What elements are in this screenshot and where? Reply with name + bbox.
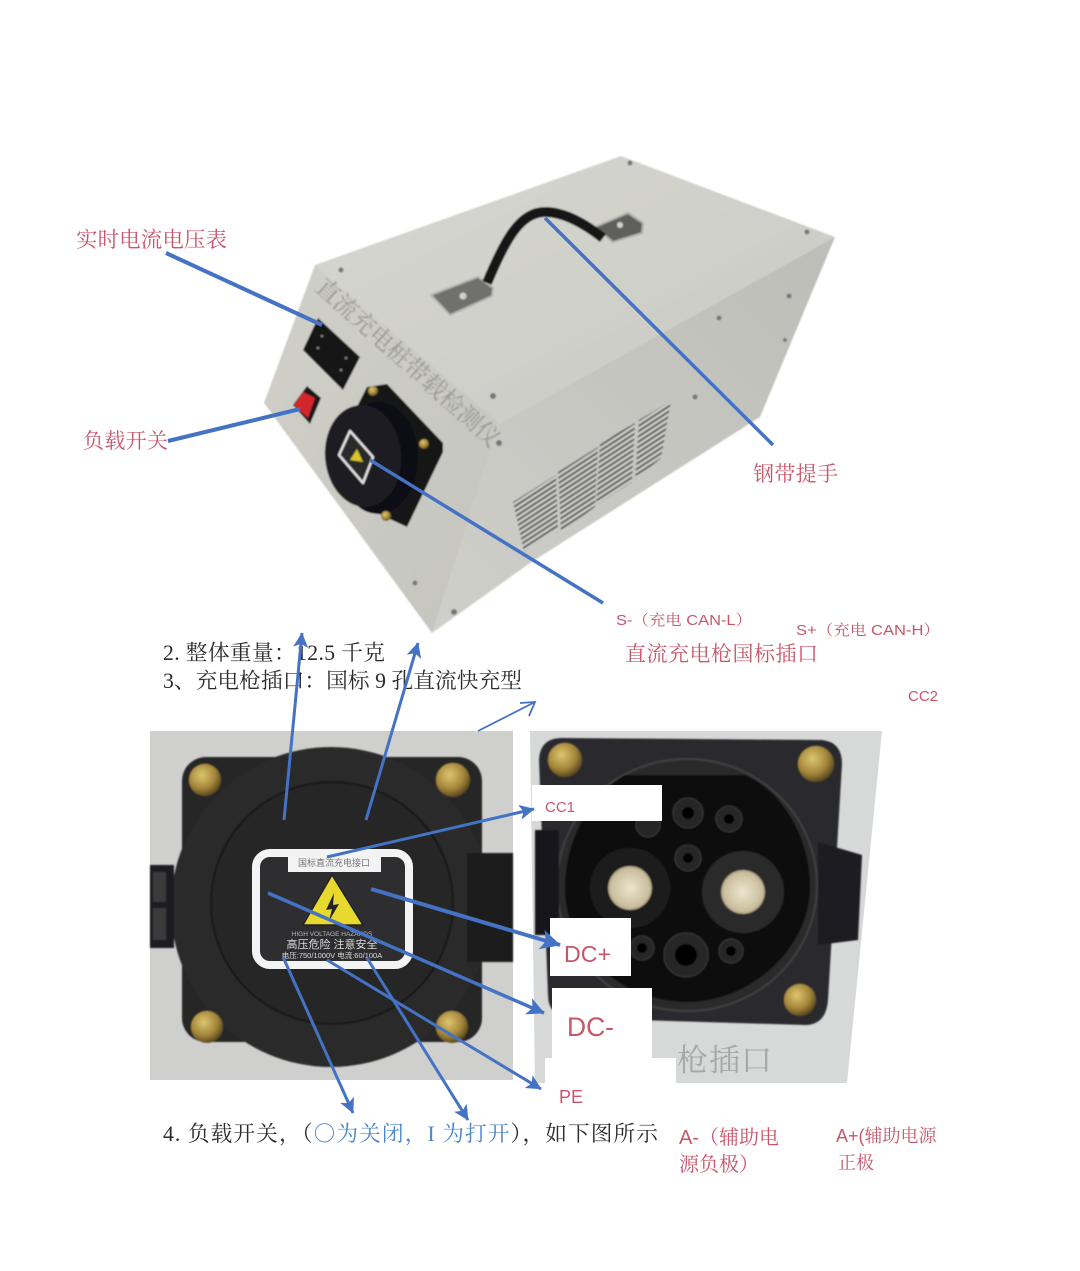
label: DC+: DC+ — [564, 941, 611, 967]
arrow: voltmeter — [166, 253, 322, 325]
socket cavity — [565, 775, 810, 1002]
arrow: A+ — [367, 958, 468, 1120]
label: CC2: CC2 — [908, 688, 938, 705]
DC charge gun socket — [321, 384, 443, 527]
rear mounting plate — [182, 757, 482, 1042]
white label patches — [532, 785, 676, 1096]
warning label: 高压危险 注意安全 — [286, 937, 378, 951]
box top face — [315, 156, 835, 423]
arrow: up to S+ — [366, 643, 418, 820]
steel strap handle — [431, 212, 643, 315]
real-time voltmeter display — [303, 318, 360, 390]
arrow: up to S- — [284, 633, 302, 820]
label: S+: S+（充电 CAN-H ） — [796, 619, 940, 640]
label: PE: PE — [559, 1087, 583, 1107]
arrow: to CC2 — [478, 702, 535, 731]
label: A-: 源负极） — [679, 1153, 759, 1176]
label: CC1: CC1 — [545, 799, 575, 816]
front panel engraved title: 直流充电桩带载检测仪 — [310, 273, 505, 453]
socket bezel — [557, 759, 817, 1011]
warning label — [256, 852, 409, 965]
body text: weight: 2. 整体重量：12.5 千克 — [163, 641, 385, 665]
body text: gun socket: 3、充电枪插口：国标 9 孔直流快充型 — [163, 669, 522, 693]
front screws — [548, 743, 834, 1016]
body text: load switch note: 4. 负载开关，（○为关闭，I 为打开），如下图所示 — [163, 1117, 658, 1148]
warning label: 电压:750/1000V 电流:60/100A — [282, 950, 382, 960]
label: national standard socket: 直流充电枪国标插口 — [625, 642, 818, 666]
arrow: load switch — [168, 409, 300, 441]
signal pins — [630, 798, 743, 977]
ghost panel lettering: 枪插口 — [677, 1043, 772, 1078]
rear cover rings — [171, 747, 491, 1067]
arrow: CC1 — [327, 809, 534, 857]
front mounting plate — [539, 738, 842, 1025]
label: steel handle: 钢带提手 — [753, 462, 838, 486]
arrow: PE — [327, 960, 541, 1089]
label: load switch: 负载开关 — [83, 429, 168, 453]
box side face — [432, 237, 835, 633]
box front face — [264, 265, 500, 633]
photo: load tester box — [264, 156, 835, 633]
photo: socket rear label view — [150, 731, 513, 1080]
label: A+: 辅助电源 — [865, 1126, 938, 1146]
right latch with hinge — [818, 842, 862, 945]
label: S-: S-（充电 CAN-L ） — [616, 609, 752, 630]
photo: socket front view — [530, 731, 882, 1083]
load switch — [293, 386, 321, 424]
label: A-: A- — [679, 1127, 699, 1149]
label: voltmeter: 实时电流电压表 — [76, 228, 227, 252]
left latch — [150, 865, 174, 948]
label: A+: 正极 — [838, 1152, 874, 1173]
label: DC-: DC- — [567, 1012, 614, 1042]
warning label: 国标直流充电接口 — [298, 857, 370, 868]
warning label: HIGH VOLTAGE HAZARDS — [292, 931, 373, 938]
DC terminals — [590, 848, 784, 933]
side vent grilles — [513, 401, 671, 552]
label: A+: A+( — [836, 1126, 865, 1146]
arrow: DC- — [268, 893, 544, 1013]
arrow: DC+ — [371, 889, 560, 945]
right latch — [467, 853, 513, 962]
arrow: gun socket — [370, 460, 603, 603]
label: A-: （辅助电 — [699, 1126, 779, 1149]
pin holes — [637, 807, 736, 966]
rear screws — [189, 763, 470, 1043]
arrow: handle — [545, 218, 773, 445]
box screws — [338, 160, 810, 615]
arrow: A- — [283, 957, 353, 1113]
left spring latch — [535, 830, 559, 935]
